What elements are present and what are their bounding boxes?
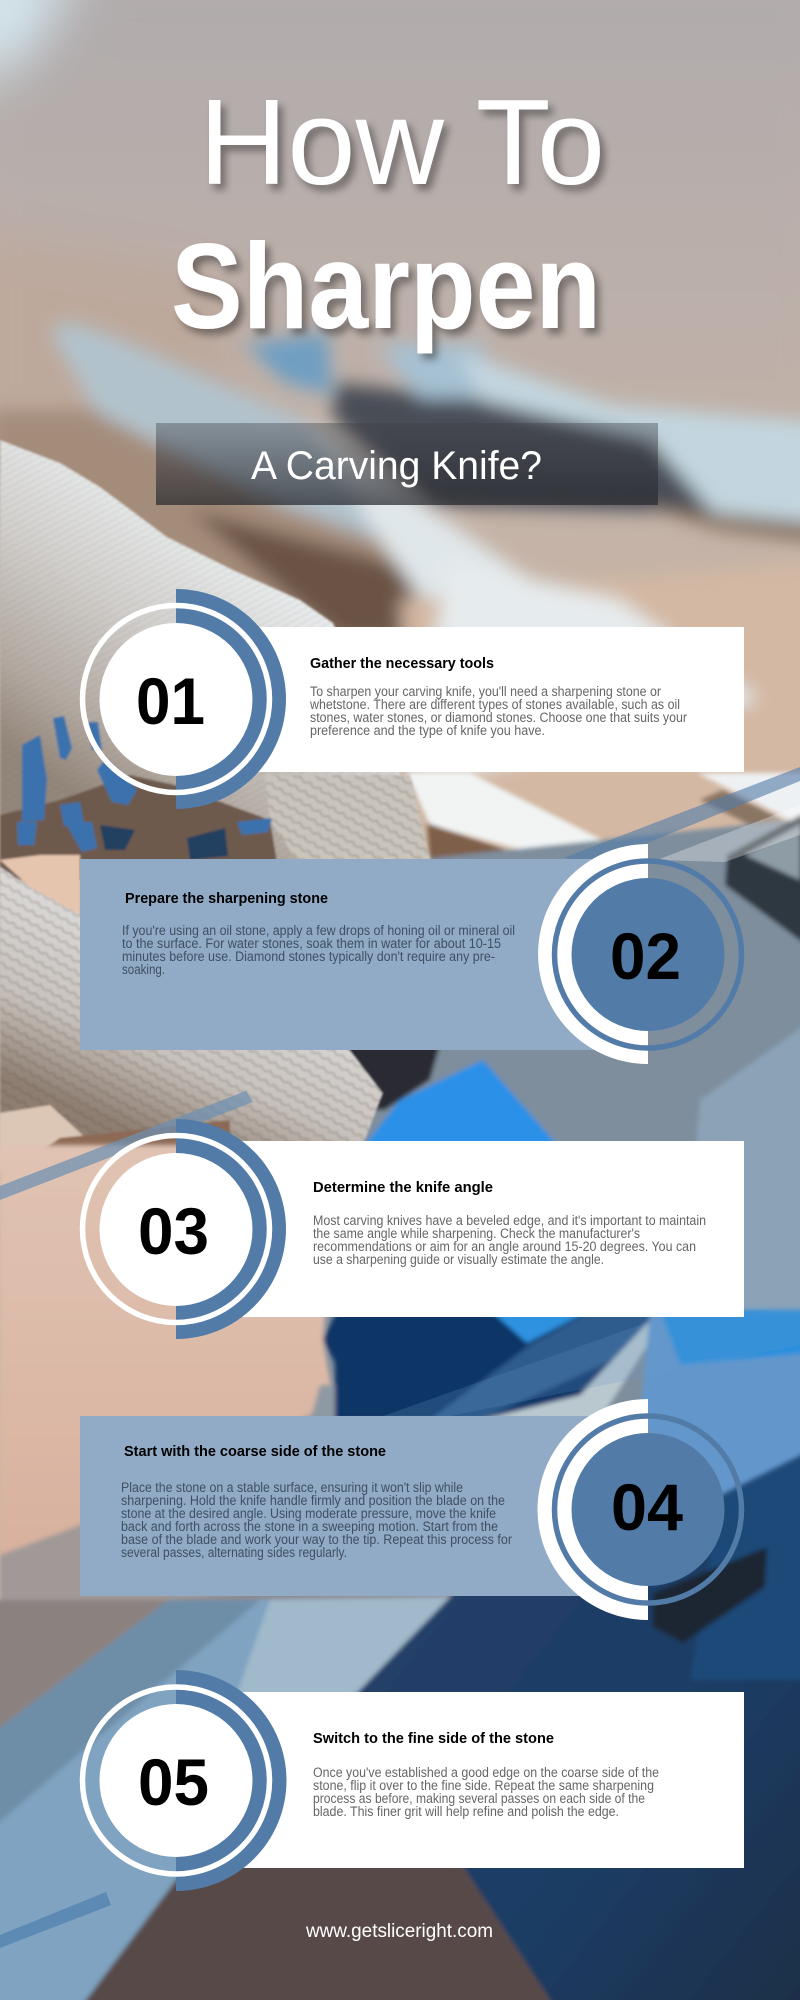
text: step 4 description: sharpening. Hold the knife handle firmly and position the blade on the bbox=[121, 1493, 505, 1508]
translucent stripe, left of step 3 bbox=[0, 1091, 253, 1200]
title bbox=[171, 74, 605, 354]
translucent stripe, bottom left bbox=[0, 1892, 111, 1948]
heading: step 2: Prepare the sharpening stone bbox=[125, 890, 328, 907]
heading: step 5: Switch to the fine side of the stone bbox=[313, 1730, 554, 1747]
panel: step 1 bbox=[82, 589, 744, 809]
text: step 1 description: stones, water stones, or diamond stones. Choose one that suits your bbox=[310, 710, 687, 725]
text: step 3 description: recommendations or aim for an angle around 15-20 degrees. You can bbox=[313, 1239, 696, 1254]
panel: step 2 bbox=[80, 844, 742, 1064]
title: How To bbox=[199, 74, 605, 210]
heading: step 3: Determine the knife angle bbox=[313, 1179, 493, 1196]
panel: step 3 bbox=[82, 1119, 744, 1339]
translucent stripe across navy block bbox=[383, 1310, 800, 1418]
text: step 3 description: Most carving knives have a beveled edge, and it's important to maintain bbox=[313, 1213, 706, 1228]
text: step 4 description: stone at the desired angle. Using moderate pressure, move the knife bbox=[121, 1506, 496, 1521]
text: step 1 description: To sharpen your carving knife, you'll need a sharpening stone or bbox=[310, 684, 661, 699]
text: step 3 description bbox=[313, 1213, 706, 1267]
footer website url: www.getsliceright.com bbox=[305, 1921, 493, 1942]
text: step 4 description: Place the stone on a stable surface, ensuring it won't slip while bbox=[121, 1480, 463, 1495]
text: step 1 description: whetstone. There are different types of stones available, such as oil bbox=[309, 697, 680, 712]
table / wood bbox=[0, 1145, 340, 1555]
title: Sharpen bbox=[171, 218, 601, 354]
decorative translucent stripe, upper right bbox=[563, 767, 800, 862]
text: step 4 description: back and forth across the stone in a sweeping motion. Start from the bbox=[121, 1519, 498, 1534]
heading: step 4: Start with the coarse side of the stone bbox=[124, 1443, 386, 1460]
panel: step 5 bbox=[82, 1670, 744, 1891]
icon: step 2 number badge: 02 bbox=[610, 919, 681, 993]
blade running lower left bbox=[0, 1597, 450, 2000]
panel: step 4 bbox=[80, 1399, 742, 1620]
icon: step 5 number badge: 05 bbox=[138, 1745, 209, 1819]
skin gap bbox=[0, 855, 80, 915]
icon: step 3 number badge bbox=[82, 1119, 286, 1339]
white blade and beige table under card 1 bbox=[407, 773, 612, 860]
text: step 3 description: use a sharpening guide or visually estimate the angle. bbox=[313, 1252, 604, 1267]
text: step 4 description: several passes, alternating sides regularly. bbox=[121, 1545, 347, 1560]
grey stone bbox=[300, 815, 800, 1340]
icon: step 1 number badge bbox=[82, 589, 286, 809]
text: step 4 description: base of the blade and work your way to the tip. Repeat this process for bbox=[121, 1532, 512, 1547]
text: step 2 description bbox=[122, 923, 515, 977]
icon: step 2 number badge bbox=[538, 844, 742, 1064]
heading: step 1: Gather the necessary tools bbox=[310, 655, 494, 672]
text: step 5 description: Once you've established a good edge on the coarse side of the bbox=[313, 1765, 659, 1780]
icon: step 3 number badge: 03 bbox=[138, 1194, 209, 1268]
text: step 5 description: blade. This finer grit will help refine and polish the edge. bbox=[313, 1804, 619, 1819]
translucent stripe, pale, upper right bbox=[657, 805, 800, 862]
text: step 2 description: to the surface. For water stones, soak them in water for about 10-15 bbox=[122, 936, 501, 951]
text: step 2 description: soaking. bbox=[122, 962, 165, 977]
text: step 4 description bbox=[121, 1480, 512, 1560]
subtitle banner: A Carving Knife? bbox=[251, 444, 542, 488]
lower glove bbox=[0, 867, 383, 1150]
text: step 5 description: stone, flip it over to the fine side. Repeat the same sharpening bbox=[313, 1778, 654, 1793]
text: step 2 description: minutes before use. Diamond stones typically don't require any pre- bbox=[122, 949, 495, 964]
text: step 2 description: If you're using an oil stone, apply a few drops of honing oil or mineral oil bbox=[122, 923, 515, 938]
text: step 1 description: preference and the type of knife you have. bbox=[310, 723, 545, 738]
navy lower right bbox=[350, 1420, 800, 2000]
icon: step 4 number badge: 04 bbox=[611, 1470, 683, 1544]
icon: step 5 number badge bbox=[82, 1670, 286, 1891]
text: step 1 description bbox=[309, 684, 687, 738]
text: step 3 description: the same angle while sharpening. Check the manufacturer's bbox=[313, 1226, 640, 1241]
brown wood lower bbox=[56, 1700, 576, 2000]
text: step 5 description bbox=[313, 1765, 659, 1819]
upper glove bbox=[0, 440, 430, 1170]
text: step 5 description: process as before, making several passes on each side of the bbox=[313, 1791, 645, 1806]
icon: step 4 number badge bbox=[538, 1399, 742, 1620]
subtitle banner bbox=[156, 423, 658, 505]
dark navy block and bright stone bbox=[323, 1310, 660, 1420]
icon: step 1 number badge: 01 bbox=[136, 664, 205, 738]
